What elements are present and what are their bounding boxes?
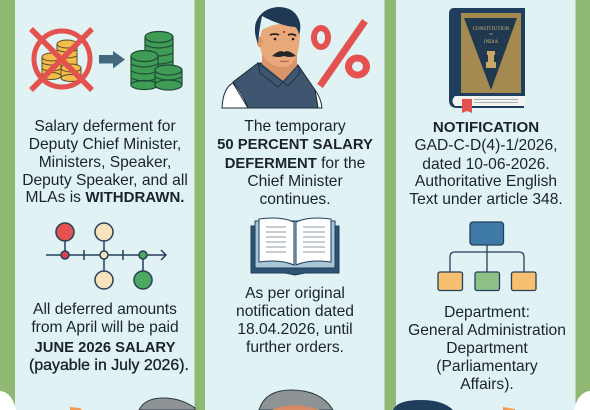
icon: constitution book: INDIA [484, 40, 498, 45]
text: original notification: 18.04.2026, until [237, 321, 353, 338]
icon: chief minister portrait [222, 7, 322, 108]
text: department [408, 304, 566, 393]
corner: white bottom right [574, 391, 590, 410]
text: notification details: dated 10-06-2026. [422, 156, 550, 173]
text: notification details [409, 119, 563, 208]
text: payment [29, 301, 189, 374]
icon: org chart [438, 222, 536, 290]
icon: constitution book [449, 8, 525, 113]
panel: notification [393, 0, 576, 410]
icon: grey head centre [259, 390, 333, 410]
text: fifty percent [217, 118, 373, 208]
text: withdrawn [22, 118, 188, 206]
text: fifty percent: The temporary [244, 118, 346, 135]
text: department: Department: [444, 304, 530, 321]
icon: partial figure bottom [70, 407, 82, 410]
text: department: Affairs). [460, 376, 514, 393]
text: payment: from April will be paid [31, 319, 179, 336]
text: original notification: As per original [245, 285, 345, 302]
text: original notification [236, 285, 354, 356]
text: notification details: GAD-C-D(4)-1/2026, [415, 137, 557, 154]
text: payment: JUNE 2026 SALARY [35, 340, 176, 356]
text: fifty percent: 50 PERCENT SALARY [217, 137, 373, 153]
icon: arrow [99, 51, 125, 68]
text: withdrawn: MLAs is WITHDRAWN. [26, 189, 184, 206]
icon: percent sign [314, 21, 366, 86]
icon: navy head right [393, 400, 453, 410]
corner: white bottom left [0, 391, 16, 410]
text: fifty percent: continues. [259, 191, 331, 208]
text: fifty percent: Chief Minister [247, 173, 343, 190]
text: payment: All deferred amounts [33, 301, 177, 318]
icon: constitution book: OF [489, 32, 493, 36]
text: notification details: Text under article 348. [409, 191, 563, 208]
text: withdrawn: Deputy Speaker, and all [22, 172, 188, 189]
text: department: Department [446, 340, 528, 357]
text: original notification: notification dated [236, 303, 354, 320]
text: payment: (payable in July 2026). [29, 357, 189, 374]
icon: grey head left [139, 398, 195, 410]
text: original notification: further orders. [246, 339, 344, 356]
icon: partial figure right [503, 407, 515, 410]
text: withdrawn: Salary deferment for [34, 118, 176, 135]
icon: timeline [46, 223, 166, 289]
text: fifty percent: DEFERMENT for the [225, 155, 365, 172]
text: department: (Parliamentary [436, 358, 538, 375]
panel: chief minister [205, 0, 384, 410]
text: department: General Administration [408, 322, 566, 339]
icon: constitution book: CONSTITUTION [473, 27, 510, 32]
text: notification details: Authoritative English [415, 173, 557, 190]
icon: green coin stacks [131, 32, 182, 90]
icon: open book [251, 218, 339, 275]
icon: forehead centre [272, 406, 320, 410]
text: withdrawn: Ministers, Speaker, [39, 154, 171, 171]
panel: salary withdrawn [15, 0, 195, 410]
text: notification details: NOTIFICATION [433, 119, 539, 136]
icon: crossed out coins [31, 29, 92, 90]
text: withdrawn: Deputy Chief Minister, [29, 136, 181, 153]
